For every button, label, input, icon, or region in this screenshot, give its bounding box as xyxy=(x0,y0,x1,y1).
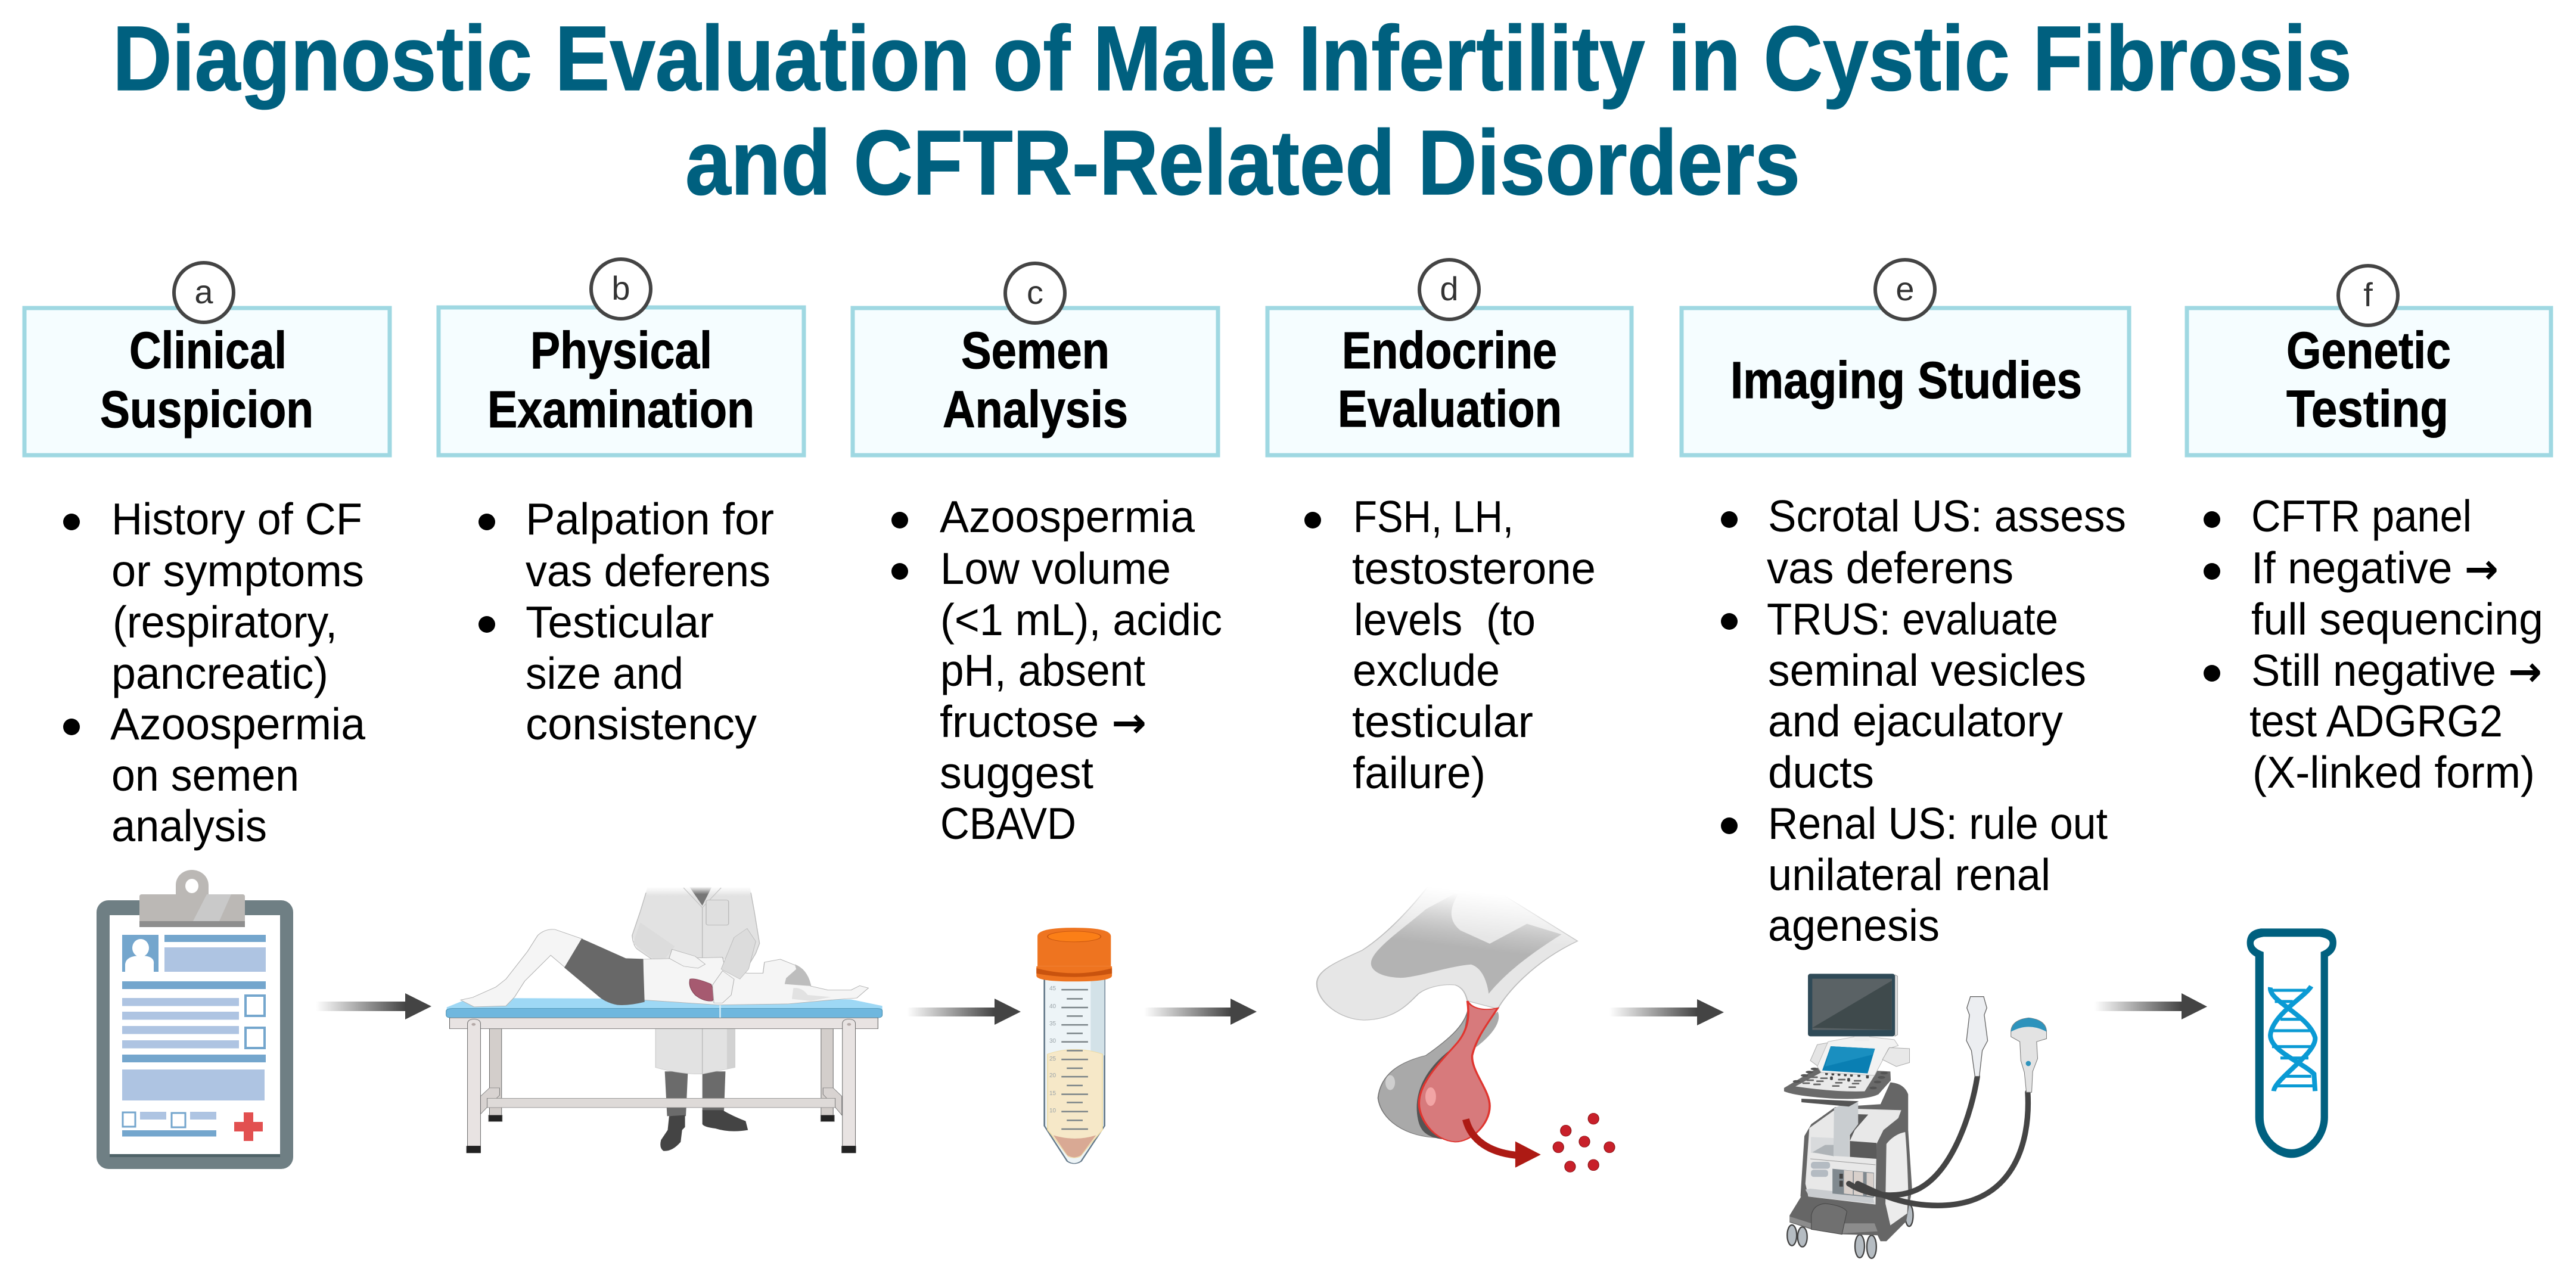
panel: imaging studies xyxy=(1682,260,2129,950)
bullet list d: FSH, LH, xyxy=(1353,492,1514,542)
bullet list e: Scrotal US: assess xyxy=(1768,491,2126,541)
wheels xyxy=(1787,1205,1913,1258)
header box d xyxy=(1267,308,1632,455)
bullet list a: on semen xyxy=(111,750,299,800)
heading b: Physical xyxy=(530,322,712,380)
heading d: Evaluation xyxy=(1338,380,1562,438)
badge b: b xyxy=(611,269,630,307)
bullet list a xyxy=(63,494,365,851)
tube graduations xyxy=(1049,985,1056,1114)
heading b xyxy=(487,322,754,439)
bullet list f: If negative → xyxy=(2251,543,2499,593)
linear probe xyxy=(1966,997,1988,1077)
physician legs and shoes xyxy=(660,1071,748,1151)
convex probe xyxy=(2011,1018,2046,1092)
title xyxy=(113,7,2352,214)
bullet list b: vas deferens xyxy=(526,546,770,596)
bullet list f: full sequencing xyxy=(2251,594,2543,644)
heading e: Imaging Studies xyxy=(1730,352,2082,409)
header box e xyxy=(1682,308,2129,455)
bullet list e: seminal vesicles xyxy=(1768,645,2086,695)
bullet list e: vas deferens xyxy=(1767,543,2013,593)
panel: clinical suspicion xyxy=(24,263,390,851)
bullet list b: consistency xyxy=(526,699,757,749)
badge c: c xyxy=(1027,273,1043,311)
tube graduations: 45 xyxy=(1049,985,1056,992)
cart base xyxy=(1789,1190,1912,1241)
heading a xyxy=(100,322,313,439)
bullet list c xyxy=(891,492,1222,848)
badge c xyxy=(1005,263,1065,323)
heading f: Genetic xyxy=(2286,322,2451,380)
bullet list a: Azoospermia xyxy=(110,699,365,749)
bullet list b xyxy=(478,494,774,749)
badge a xyxy=(174,263,234,322)
physician upper coat xyxy=(632,887,760,979)
physician lower coat xyxy=(655,1029,735,1074)
panel: semen analysis xyxy=(853,263,1222,848)
bullet list b: size and xyxy=(526,648,683,698)
tube graduations: 25 xyxy=(1049,1056,1056,1062)
icon: testis with hormone secretion xyxy=(1317,879,1615,1172)
bullet list e: Renal US: rule out xyxy=(1768,798,2108,848)
heading b: Examination xyxy=(487,381,754,439)
badge f xyxy=(2338,266,2398,325)
heading c: Analysis xyxy=(943,381,1128,439)
bullet list a: History of CF xyxy=(111,494,362,544)
physician sleeve and hands xyxy=(669,928,756,1003)
icon: patient on examination table with physician xyxy=(446,887,883,1153)
bullet list f: CFTR panel xyxy=(2251,491,2472,541)
bullet list c: Azoospermia xyxy=(940,492,1195,542)
bullet list e: and ejaculatory xyxy=(1768,696,2063,746)
cart body xyxy=(1800,1083,1912,1226)
heading c: Semen xyxy=(961,322,1110,380)
bullet list d: levels (to xyxy=(1354,595,1536,645)
bullet list d: testosterone xyxy=(1352,543,1596,593)
bullet list a: pancreatic) xyxy=(111,648,328,698)
title: Diagnostic Evaluation of Male Infertility in Cystic Fibrosis xyxy=(113,7,2352,110)
tube graduations: 35 xyxy=(1049,1021,1056,1027)
header box b xyxy=(439,307,804,455)
heading f xyxy=(2286,322,2451,438)
panel: genetic testing xyxy=(2187,266,2551,797)
tube graduations: 30 xyxy=(1049,1038,1056,1044)
bullet list c: suggest xyxy=(940,748,1093,798)
bullet list e: TRUS: evaluate xyxy=(1767,594,2058,644)
table frame xyxy=(450,1018,878,1153)
bullet list d: failure) xyxy=(1353,748,1486,798)
bullet list c: Low volume xyxy=(940,543,1171,593)
panel: physical examination xyxy=(439,259,804,749)
tube graduations: 10 xyxy=(1049,1108,1056,1114)
monitor xyxy=(1808,974,1898,1036)
console xyxy=(1784,1068,1891,1106)
heading a: Suspicion xyxy=(100,381,313,439)
badge b xyxy=(591,259,651,319)
arrow: imaging to genetic xyxy=(2095,993,2207,1019)
bullet list b: Palpation for xyxy=(526,494,774,544)
control screen xyxy=(1810,1035,1910,1075)
tube graduations: 20 xyxy=(1049,1072,1056,1079)
badge d: d xyxy=(1440,270,1459,307)
bullet list c: fructose → xyxy=(940,697,1146,747)
icon: test tube with DNA helix xyxy=(2247,928,2336,1158)
arrow: semen to endocrine xyxy=(1144,999,1257,1025)
bullet list e: agenesis xyxy=(1768,900,1940,950)
table back legs xyxy=(489,1029,834,1121)
bullet list e: ducts xyxy=(1768,747,1874,797)
badge e: e xyxy=(1896,270,1915,307)
heading f: Testing xyxy=(2286,380,2448,438)
title: and CFTR-Related Disorders xyxy=(685,111,1800,214)
arrow: physical to semen xyxy=(907,999,1021,1025)
arrow: endocrine to imaging xyxy=(1609,999,1724,1025)
badge f: f xyxy=(2363,276,2373,313)
tube graduations: 15 xyxy=(1049,1090,1056,1097)
bullet list d: testicular xyxy=(1352,697,1533,747)
bullet list b: Testicular xyxy=(526,597,714,647)
badge e xyxy=(1875,260,1935,319)
bullet list c: CBAVD xyxy=(940,798,1076,848)
tube graduations: 40 xyxy=(1049,1003,1056,1010)
icon: medical record clipboard xyxy=(97,870,293,1169)
bullet list f xyxy=(2204,491,2543,797)
header box a xyxy=(24,308,390,455)
bullet list e: unilateral renal xyxy=(1768,850,2050,900)
header box f xyxy=(2187,308,2551,455)
bullet list e xyxy=(1721,491,2126,950)
bullet list f: Still negative → xyxy=(2251,645,2542,696)
heading c xyxy=(943,322,1128,439)
bullet list a: (respiratory, xyxy=(113,597,337,647)
bullet list f: test ADGRG2 xyxy=(2249,696,2503,746)
header box c xyxy=(853,308,1218,455)
bullet list a: or symptoms xyxy=(111,546,364,596)
panel: endocrine evaluation xyxy=(1267,260,1632,798)
bullet list c: pH, absent xyxy=(940,645,1145,695)
bullet list a: analysis xyxy=(111,801,267,851)
badge a: a xyxy=(194,273,213,310)
badge d xyxy=(1419,260,1479,319)
heading d xyxy=(1338,322,1562,438)
icon: ultrasound machine with probes xyxy=(1784,974,2046,1258)
DNA helix xyxy=(2270,986,2315,1091)
bullet list d xyxy=(1304,492,1596,798)
arrow: clinical to physical xyxy=(316,993,431,1019)
heading d: Endocrine xyxy=(1342,322,1557,380)
icon: conical semen sample tube xyxy=(1036,928,1112,1164)
table mattress xyxy=(446,998,883,1018)
bullet list c: (<1 mL), acidic xyxy=(940,595,1222,645)
bullet list d: exclude xyxy=(1353,645,1500,695)
patient xyxy=(461,929,868,1007)
heading a: Clinical xyxy=(129,322,287,380)
cables xyxy=(1849,1077,2028,1205)
bullet list f: (X-linked form) xyxy=(2252,747,2535,797)
